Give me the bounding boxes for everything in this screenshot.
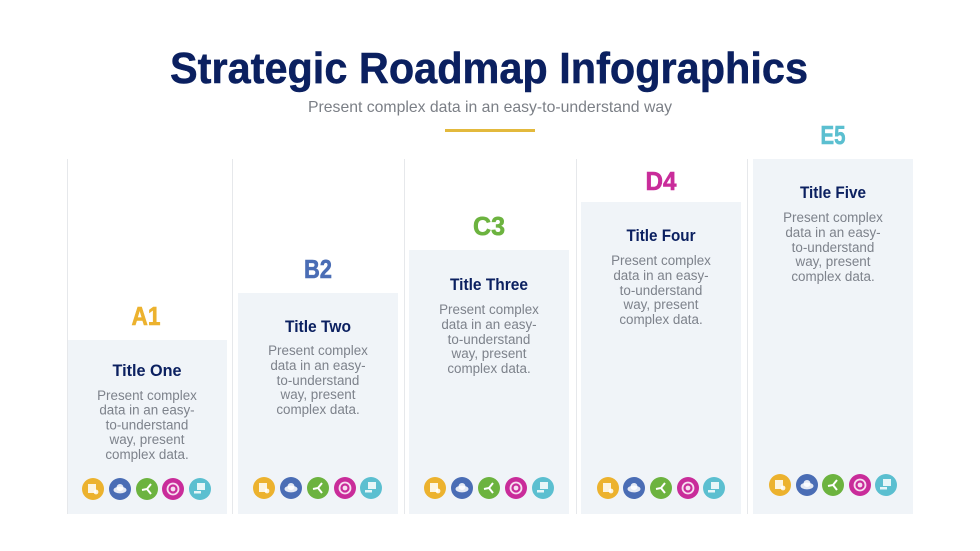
body text 4: Present complex	[611, 253, 711, 268]
body text 5: Present complex	[783, 210, 883, 225]
column 2: Title Two	[232, 159, 398, 514]
label E5: E5	[820, 120, 846, 150]
body text 4: data in an easy-	[613, 268, 709, 283]
panel 1	[68, 340, 227, 514]
panel 3	[409, 250, 569, 514]
panel 4	[581, 202, 741, 514]
heading 2: Title Two	[285, 317, 351, 336]
label D4: D4	[646, 166, 677, 196]
body text 4: complex data.	[619, 312, 703, 327]
title accent underline	[445, 129, 535, 132]
heading 5: Title Five	[800, 183, 866, 202]
icon row 2	[253, 477, 382, 499]
body text 3: way, present	[451, 346, 527, 361]
body text 5: data in an easy-	[785, 225, 881, 240]
body text 5: way, present	[795, 254, 871, 269]
column 4: Title Four	[576, 159, 741, 514]
panel 2	[238, 293, 398, 514]
label A1: A1	[132, 301, 160, 331]
icon row 3	[424, 477, 554, 499]
body text 1: Present complex	[97, 388, 197, 403]
label B2: B2	[304, 254, 332, 284]
body text 3: Present complex	[439, 302, 539, 317]
panel 5	[753, 159, 913, 514]
column 3: Title Three	[404, 159, 569, 514]
heading 1: Title One	[112, 361, 182, 380]
label C3: C3	[473, 211, 505, 241]
icon row 4	[597, 477, 725, 499]
body text 2: way, present	[280, 387, 356, 402]
body text 1: data in an easy-	[99, 402, 195, 418]
body text 2: complex data.	[276, 402, 360, 417]
body text 2: data in an easy-	[270, 358, 366, 373]
body text 5: to-understand	[792, 240, 874, 255]
heading 4: Title Four	[626, 226, 696, 245]
icon row 1	[82, 478, 211, 500]
subtitle: Present complex data in an easy-to-understand way	[308, 99, 672, 116]
body text 2: to-understand	[277, 373, 359, 388]
body text 3: complex data.	[447, 361, 531, 376]
body text 1: complex data.	[105, 447, 189, 462]
body text 1: to-understand	[106, 418, 188, 432]
icon row 5	[769, 474, 897, 496]
body text 4: way, present	[623, 297, 699, 312]
column 5: Title Five	[748, 120, 913, 514]
body text 3: data in an easy-	[441, 317, 537, 332]
body text 3: to-understand	[448, 332, 530, 347]
heading 3: Title Three	[450, 275, 528, 294]
body text 1: way, present	[109, 432, 185, 447]
body text 5: complex data.	[791, 269, 875, 284]
title: Strategic Roadmap Infographics	[170, 44, 808, 93]
column 1: Title One	[68, 159, 227, 514]
body text 2: Present complex	[268, 343, 368, 358]
body text 4: to-understand	[620, 283, 702, 298]
